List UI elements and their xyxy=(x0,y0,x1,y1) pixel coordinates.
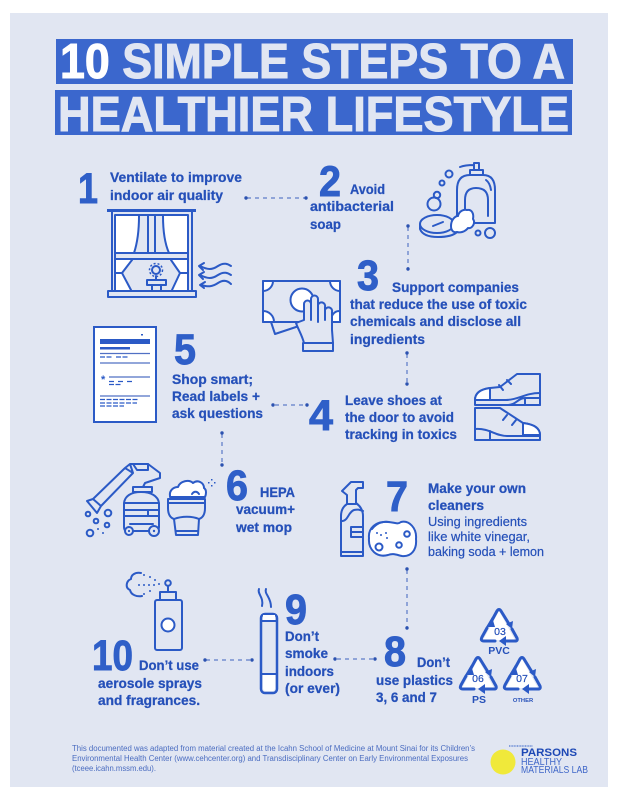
arrow: step 10 to 9 xyxy=(203,658,254,662)
logo: Parsons Healthy Materials Lab: HEALTHY xyxy=(521,757,562,768)
step 6 text: 6 xyxy=(226,462,248,510)
step 8 text xyxy=(376,628,453,705)
step 10 text xyxy=(92,632,202,708)
arrow: step 3 to 4 xyxy=(405,351,409,386)
step 7 text: Make your own xyxy=(428,480,526,496)
footer source note xyxy=(72,744,475,773)
step 6 text xyxy=(226,462,295,535)
step 5 text: Shop smart; xyxy=(172,371,253,387)
icon: recycling triangle 03 PVC xyxy=(481,610,517,657)
footer source note: This documented was adapted from material created at the Icahn School of Medicine at Mount Sinai for its Children’s xyxy=(72,744,475,753)
step 8 text: 3, 6 and 7 xyxy=(376,689,437,705)
icon: aerosol spray can xyxy=(127,573,182,650)
arrow: step 7 to 8 xyxy=(405,567,409,630)
icon: recycling triangle 03 PVC: PVC xyxy=(488,645,510,657)
step 2 text: 2 xyxy=(319,158,341,206)
arrow: step 2 to 3 xyxy=(406,224,410,271)
title: HEALTHIER LIFESTYLE xyxy=(58,88,569,142)
icon: recycling triangle 07 other: OTHER xyxy=(513,698,534,704)
icon: sponge xyxy=(369,522,416,556)
step 9 text: indoors xyxy=(285,663,334,679)
step 10 text: and fragrances. xyxy=(98,692,200,708)
step 3 text xyxy=(350,252,527,347)
step 9 text: (or ever) xyxy=(285,680,340,696)
step 3 text: that reduce the use of toxic xyxy=(350,296,527,312)
step 4 text xyxy=(309,392,457,442)
step 9 text: smoke xyxy=(285,645,328,661)
step 6 text: vacuum+ xyxy=(236,501,295,517)
icon: recycling triangle 03 PVC: 03 xyxy=(494,626,506,638)
title: 10 SIMPLE STEPS TO A xyxy=(60,35,565,89)
step 7 text: like white vinegar, xyxy=(428,530,530,544)
step 9 text: Don’t xyxy=(285,628,319,644)
icon: cigarette xyxy=(259,589,277,693)
icon: recycling triangle 06 PS: 06 xyxy=(472,673,484,685)
step 10 text: aerosole sprays xyxy=(98,675,202,691)
step 2 text: antibacterial xyxy=(310,198,394,214)
step 1 text xyxy=(78,165,242,213)
step 7 text xyxy=(386,473,544,559)
step 2 text: Avoid xyxy=(350,181,385,197)
step 1 text: indoor air quality xyxy=(110,187,223,203)
icon: vacuum cleaner xyxy=(86,464,160,536)
icon: mop bucket xyxy=(168,479,216,535)
icon: recycling triangle 07 other: 07 xyxy=(516,673,528,685)
step 5 text: 5 xyxy=(174,326,196,374)
icon: pair of shoes xyxy=(475,374,540,440)
icon: document with labels: * xyxy=(101,374,106,386)
step 2 text: soap xyxy=(310,216,341,232)
title xyxy=(55,35,573,142)
step 1 text: 1 xyxy=(78,165,98,213)
step 4 text: the door to avoid xyxy=(345,409,454,425)
step 7 text: baking soda + lemon xyxy=(428,545,544,559)
icon: soap bottle and bar xyxy=(420,163,495,238)
step 5 text xyxy=(172,326,263,421)
step 6 text: HEPA xyxy=(260,484,295,500)
step 4 text: 4 xyxy=(309,392,333,440)
arrow: step 5 to 6 xyxy=(220,431,224,467)
icon: spray bottle xyxy=(341,482,363,556)
step 3 text: 3 xyxy=(357,252,379,300)
footer source note: (tceee.icahn.mssm.edu). xyxy=(72,764,156,773)
logo: Parsons Healthy Materials Lab xyxy=(490,746,588,776)
arrow: step 1 to 2 xyxy=(244,196,308,200)
logo: Parsons Healthy Materials Lab: PARSONS xyxy=(521,747,577,759)
step 8 text: use plastics xyxy=(376,672,453,688)
step 9 text xyxy=(285,586,340,696)
step 9 text: 9 xyxy=(285,586,307,634)
step 7 text: cleaners xyxy=(428,497,484,513)
icon: banknote and hand xyxy=(263,281,340,351)
arrow: step 5 to 4 xyxy=(271,403,309,407)
icon: document with labels xyxy=(94,327,156,422)
logo: Parsons Healthy Materials Lab: MATERIALS LAB xyxy=(521,765,588,776)
icon: wind arrows xyxy=(199,263,231,288)
step 5 text: Read labels + xyxy=(172,388,260,404)
step 3 text: chemicals and disclose all xyxy=(350,313,521,329)
step 4 text: tracking in toxics xyxy=(345,426,457,442)
step 1 text: Ventilate to improve xyxy=(110,169,242,185)
arrow: step 9 to 8 xyxy=(333,657,377,661)
step 10 text: Don’t use xyxy=(139,657,199,673)
step 2 text xyxy=(310,158,394,232)
step 7 text: Using ingredients xyxy=(428,515,527,529)
step 6 text: wet mop xyxy=(235,519,292,535)
step 3 text: ingredients xyxy=(350,331,425,347)
step 10 text: 10 xyxy=(92,632,133,680)
step 5 text: ask questions xyxy=(172,405,263,421)
icon: recycling triangle 06 PS xyxy=(460,658,496,706)
icon: recycling triangle 07 other xyxy=(504,658,540,704)
footer source note: Environmental Health Center (www.cehcenter.org) and Transdisciplinary Center on Early Environmental Exposures xyxy=(72,754,468,763)
step 8 text: 8 xyxy=(384,628,406,676)
step 8 text: Don’t xyxy=(417,654,450,670)
icon: recycling triangle 06 PS: PS xyxy=(472,694,486,706)
icon: window with curtains xyxy=(107,209,196,297)
step 4 text: Leave shoes at xyxy=(345,392,442,408)
step 7 text: 7 xyxy=(386,473,408,521)
step 3 text: Support companies xyxy=(392,279,519,295)
